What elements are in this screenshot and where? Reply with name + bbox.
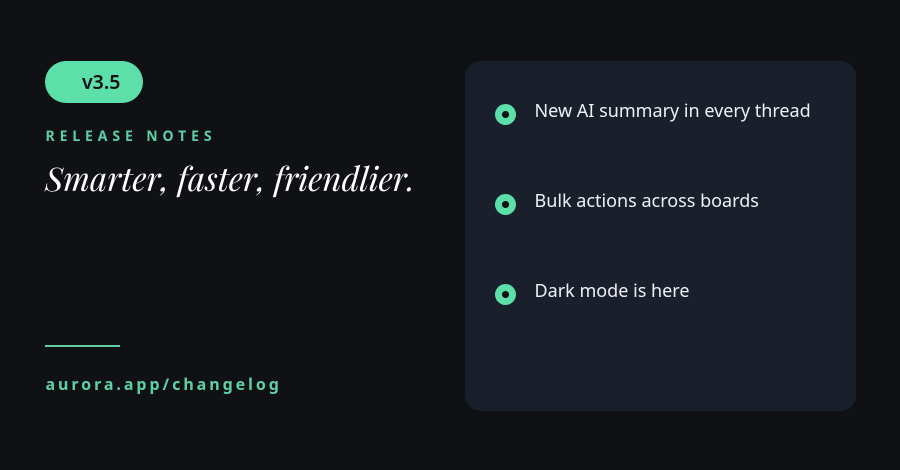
item 3 bullet <box>495 284 516 305</box>
item 1 bullet <box>495 104 516 125</box>
item 2 text: Bulk actions across boards <box>534 189 759 213</box>
item 3 text: Dark mode is here <box>534 279 690 303</box>
version label: v3.5 <box>82 68 120 95</box>
eyebrow: release notes: RELEASE NOTES <box>46 127 216 146</box>
panel: release items <box>465 61 856 411</box>
title: Smarter, faster, friendlier. <box>45 156 415 200</box>
item 1 text: New AI summary in every thread <box>534 99 811 123</box>
accent line <box>45 345 120 347</box>
changelog link: aurora.app/changelog <box>46 373 282 395</box>
item 2 bullet <box>495 194 516 215</box>
version badge <box>45 61 143 103</box>
